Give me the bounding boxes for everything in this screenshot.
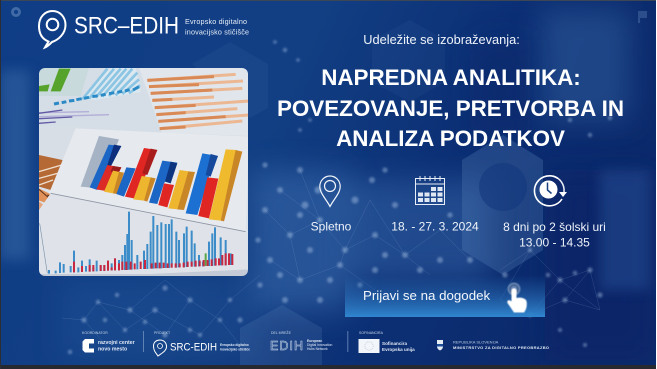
logo wordmark: SRC–EDIH xyxy=(74,12,179,40)
schedule text: 13.00 - 14.35 xyxy=(519,236,590,250)
logo: EU co-funding: SOFINANCIRA xyxy=(359,331,384,335)
logo: razvojni center: KOORDINATOR xyxy=(82,331,108,335)
blue column chart xyxy=(49,212,231,274)
location text: Spletno xyxy=(311,220,352,234)
logo: EDIH: Digital Innovation xyxy=(307,343,332,347)
logo: razvojni center: novo mesto xyxy=(98,346,127,352)
logo tagline xyxy=(185,17,249,36)
chart sheet xyxy=(49,128,249,232)
logo: Republic of Slovenia ministry: MINISTRSTVO ZA DIGITALNO PREOBRAZBO xyxy=(453,345,549,350)
title: POVEZOVANJE, PRETVORBA IN xyxy=(277,96,624,121)
logo: EDIH: European xyxy=(307,339,322,343)
logo: razvojni center xyxy=(82,331,135,352)
footer logos xyxy=(82,330,549,356)
logo: EDIH: DEL MREŽE xyxy=(271,330,292,335)
logo: project SRC-EDIH: SRC-EDIH xyxy=(170,342,217,354)
logo: EDIH: EDIH xyxy=(270,339,303,353)
logo: EDIH: Hubs Network xyxy=(307,347,328,351)
intro text: Udeležite se izobraževanja: xyxy=(363,32,520,47)
logo: project SRC-EDIH: inovacijsko stičišče xyxy=(220,348,250,352)
logo: EU co-funding: Evropska unija xyxy=(382,347,415,352)
logo: Republic of Slovenia ministry xyxy=(437,340,549,350)
logo: project SRC-EDIH: PROJEKT xyxy=(154,331,171,335)
logo tagline: Evropsko digitalno xyxy=(185,17,247,26)
logo: razvojni center: razvojni center xyxy=(98,340,135,346)
icon: pointing hand xyxy=(507,282,527,312)
lower area: 3D bars and column chart xyxy=(39,127,249,280)
info: location xyxy=(311,176,352,234)
3D bars xyxy=(90,145,121,190)
photo: printed charts xyxy=(39,66,249,280)
logo: project SRC-EDIH: Evropsko digitalno xyxy=(220,343,249,347)
icon: location speech pin xyxy=(39,11,66,48)
logo: EU co-funding: Sofinancira xyxy=(382,341,407,346)
icon: clock with arrow xyxy=(534,176,567,206)
title xyxy=(277,65,624,151)
info: date xyxy=(391,176,479,234)
logo: Republic of Slovenia ministry: REPUBLIKA SLOVENIJA xyxy=(453,340,499,344)
icon: calendar xyxy=(416,176,444,204)
title: NAPREDNA ANALITIKA: xyxy=(321,65,581,90)
button: register xyxy=(345,275,545,317)
title: ANALIZA PODATKOV xyxy=(336,126,565,151)
date text: 18. - 27. 3. 2024 xyxy=(391,220,479,234)
network pattern xyxy=(62,40,612,354)
info: schedule xyxy=(503,176,606,250)
button label: Prijavi se na dogodek xyxy=(363,288,490,303)
logo: EDIH xyxy=(270,330,332,353)
logo: SRC-EDIH xyxy=(39,11,249,48)
schedule text xyxy=(503,220,606,250)
upper papers and horizontal charts xyxy=(39,68,248,130)
icon: location pin xyxy=(320,176,340,206)
logo tagline: inovacijsko stičišče xyxy=(185,28,249,36)
schedule text: 8 dni po 2 šolski uri xyxy=(503,220,606,234)
red column chart xyxy=(74,253,232,272)
logo: EU co-funding xyxy=(358,331,415,353)
logo: project SRC-EDIH xyxy=(154,331,250,356)
